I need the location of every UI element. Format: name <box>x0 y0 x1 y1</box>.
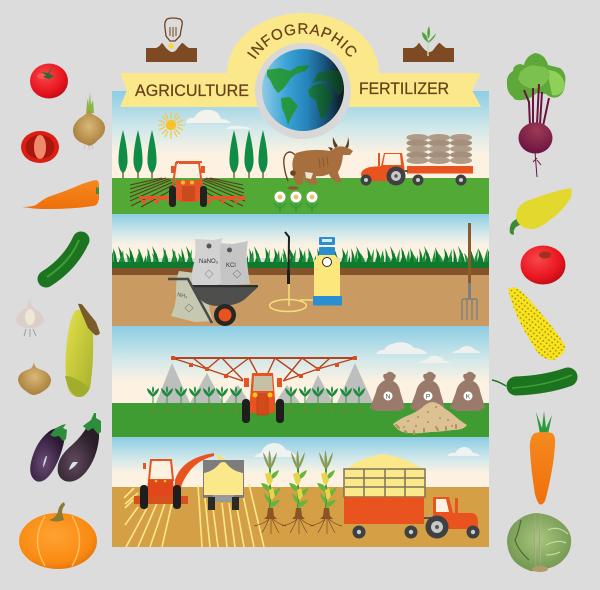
stacked sacks <box>406 134 472 164</box>
sack P: P <box>426 394 430 400</box>
ribbon <box>120 13 481 107</box>
cypress trees left <box>118 130 157 178</box>
vegetable: tomato <box>30 64 68 98</box>
fertilizer bag NaNO3 <box>192 238 223 285</box>
title: Agriculture: AGRICULTURE <box>135 82 249 100</box>
title: Fertilizer: FERTILIZER <box>359 80 449 98</box>
clouds <box>254 443 480 457</box>
pile of fertilizer granules <box>393 402 467 434</box>
soil <box>112 275 489 326</box>
vegetable: sprouting onion <box>73 91 105 150</box>
grain cart <box>203 453 244 510</box>
crop rows <box>147 386 365 415</box>
globe <box>255 43 351 139</box>
fertilizer bag NH4 <box>171 271 213 322</box>
vegetable: eggplant large <box>58 413 101 482</box>
harvest stripes <box>124 484 264 547</box>
pitchfork <box>462 223 477 320</box>
vegetable: yellow pepper <box>510 188 572 235</box>
wheelbarrow <box>168 279 258 326</box>
header banner <box>120 13 481 107</box>
vegetable: garlic <box>16 298 44 337</box>
daisies <box>274 192 318 212</box>
icon: hand dropping seed into soil <box>146 18 197 62</box>
title: Infographic: INFOGRAPHIC <box>247 23 356 59</box>
harvester tractor <box>134 453 214 509</box>
corn plants with roots <box>254 450 342 534</box>
sack K <box>450 372 485 411</box>
panel: boom spraying <box>112 326 489 437</box>
vegetable: beet <box>507 53 565 177</box>
icon: seedling in soil <box>403 26 454 62</box>
clouds <box>186 110 251 129</box>
field ground <box>112 178 489 214</box>
sack K: K <box>466 394 471 400</box>
panel: field ploughing <box>112 91 489 214</box>
cypress trees right <box>229 130 268 178</box>
clouds <box>376 342 481 363</box>
vegetable: corn cob <box>508 287 565 360</box>
vegetable: corn in husk <box>65 304 100 397</box>
vegetable: red tomato <box>520 246 566 284</box>
ploughed furrows <box>130 178 245 207</box>
boom sprayer tractor <box>171 356 357 423</box>
vegetable: carrot <box>22 180 99 209</box>
fertilizer bag KCl <box>218 241 250 286</box>
sack N: N <box>386 394 391 400</box>
topsoil band <box>112 268 489 276</box>
grain trailer with tractor <box>344 454 480 538</box>
vegetable: cabbage <box>507 513 571 572</box>
sack P <box>410 372 445 411</box>
vegetable: cucumber <box>46 240 81 279</box>
vegetable: carrot upright <box>530 411 555 505</box>
icon: sun <box>158 112 185 139</box>
fertilizer bag KCl: KCl <box>226 263 236 269</box>
tractor with plough <box>139 162 245 207</box>
vegetable: eggplant small <box>30 424 67 482</box>
vegetable: onion <box>18 362 51 395</box>
fertilizer bag NH4: NH₄ <box>177 292 189 300</box>
field ground <box>112 403 489 437</box>
vegetable: tomato half <box>21 131 59 163</box>
pressure sprayer <box>270 232 342 312</box>
cow <box>284 137 353 190</box>
sack N <box>370 372 405 411</box>
vegetable: cucumber long <box>492 375 572 388</box>
panel: soil and fertilizer tools <box>112 214 489 326</box>
orange tractor with trailer of sacks <box>360 134 473 186</box>
field ground <box>112 487 489 547</box>
vegetable: pumpkin <box>19 502 97 569</box>
spray cones <box>156 363 373 403</box>
grass strip <box>112 245 489 269</box>
fertilizer bag NaNO3: NaNO₃ <box>199 259 219 265</box>
panel: harvest <box>112 437 489 547</box>
